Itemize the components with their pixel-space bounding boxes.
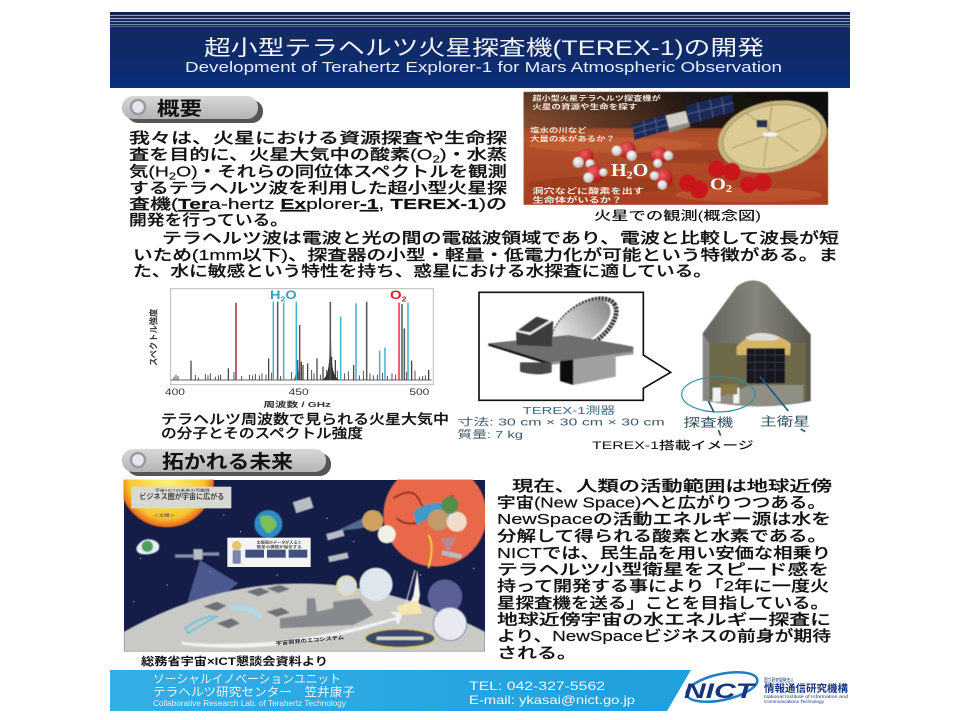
icon: light beams [186, 560, 238, 604]
axis tick labels [165, 387, 429, 397]
label: main satellite: 主衛星 [760, 415, 810, 429]
icon: water molecules [573, 141, 673, 190]
footer: contact: TEL: 042-327-5562 [469, 679, 605, 693]
text block: terahertz explanation [133, 229, 839, 280]
icon: instrument base plate [488, 335, 633, 364]
leader lines [708, 377, 805, 436]
footer: affiliation [153, 672, 355, 708]
text block: future paragraph: 星探査機を送る」ことを目指している。 [497, 595, 829, 612]
text block: terahertz explanation: テラヘルツ波は電波と光の間の電磁波領域であり、電波と比較して波長が短 [162, 229, 839, 247]
label: O2: 2 [402, 294, 407, 303]
text block: future paragraph: より、NewSpaceビジネスの前身が期待 [497, 627, 831, 645]
circle highlight on probe [682, 377, 755, 412]
label: H2O: 2 [627, 171, 633, 182]
text block: overview paragraph: 査を目的に、火星大気中の酸素(O [129, 146, 355, 164]
info box: 衛星の機能が保全する [257, 544, 302, 549]
text block: overview paragraph: 2 [169, 172, 177, 182]
chart: Martian atmosphere spectrum [148, 288, 433, 409]
icon: Earth [254, 510, 282, 538]
icon: sun [124, 480, 215, 528]
callout box: TEREX-1 instrument [479, 288, 671, 400]
logo: NICT: Communications Technology [764, 699, 825, 704]
info box [227, 538, 311, 567]
image: Mars observation concept: 生命体がいるか？ [532, 194, 622, 204]
axis title: spectral intensity: スペクトル強度 [148, 308, 159, 366]
title: 超小型テラヘルツ火星探査機(TEREX-1)の開発 [204, 37, 764, 60]
label: H2O: H [270, 288, 279, 302]
text block: terahertz explanation: いため(1mm以下)、探査器の小型・軽量・低電力化が可能という特徴がある。ま [133, 246, 838, 264]
icon: asteroid ship [365, 629, 435, 648]
icon: spacecraft solar panels and bus [632, 94, 734, 140]
image: Mars observation concept: 火星の資源や生命を探す [532, 102, 637, 111]
logo: NICT [684, 667, 849, 707]
heading: future: 拓かれる未来 [162, 451, 293, 473]
axis tick labels: 450 [289, 387, 309, 397]
figure: TEREX-1 and mounting image [457, 280, 811, 452]
label: H2O: O [633, 160, 648, 180]
illustration: space business ecosystem [124, 480, 485, 652]
label: tagline: 超小型火星テラヘルツ探査機が [532, 94, 661, 103]
ecosystem label: 宇宙開発のエコシステム [276, 634, 344, 647]
axis title: frequency: 周波数 / GHz [263, 399, 331, 409]
logo: NICT: NICT [684, 680, 757, 703]
image: Mars observation concept [523, 91, 833, 205]
text block: terahertz explanation: た、水に敏感という特性を持ち、惑星における水探査に適している。 [133, 262, 712, 280]
caption: Mars observation: 火星での観測(概念図) [594, 208, 761, 223]
text block: overview paragraph: )・水蒸 [440, 146, 507, 164]
text block: overview paragraph: O)・それらの同位体スペクトルを観測 [176, 164, 507, 180]
text block: future paragraph: 分解して得られる酸素と水素である。 [497, 528, 827, 545]
caption: source: 総務省宇宙×ICT懇談会資料より [141, 654, 328, 668]
image: Mars observation concept: 大量の水があるか？ [530, 134, 615, 143]
text block: overview paragraph: するテラヘルツ波を利用した超小型火星探 [129, 180, 507, 197]
caption: spectrum: の分子とそのスペクトル強度 [161, 426, 364, 441]
icon: parabolic disc [717, 100, 828, 174]
footer: affiliation: Collaborative Research Lab. of Terahertz Technology [153, 699, 346, 708]
label: TEREX-1 instrument: TEREX-1測器 [523, 404, 615, 417]
axis tick labels: 500 [409, 387, 429, 397]
icon: moon surface [124, 583, 485, 652]
text block: future paragraph: テラヘルツ小型衛星をスピード感を [497, 560, 829, 578]
icon: fairing cutaway [703, 280, 811, 407]
heading: overview [122, 96, 263, 123]
text block: future paragraph: される。 [497, 645, 577, 662]
label: mass: 質量: 7 kg [457, 428, 523, 441]
info box: 太陽風のデータが入ると [257, 540, 302, 545]
text block: future paragraph: 現在、人類の活動範囲は地球近傍 [512, 477, 832, 495]
label: mounting image: TEREX-1搭載イメージ [592, 438, 754, 452]
footer banner [110, 667, 849, 711]
icon: bubble views [359, 568, 393, 601]
text block: future paragraph: NewSpaceの活動エネルギー源は水を [497, 511, 831, 528]
logo: NICT: 国立研究開発法人 [764, 677, 794, 684]
sun label: ＜太陽＞ [153, 513, 176, 518]
label: O2: O [710, 174, 723, 193]
text block: overview paragraph: 開発を行っている。 [129, 212, 288, 229]
text block: future paragraph: NICTでは、民生品を用い安価な相乗り [497, 545, 831, 562]
footer: affiliation: ソーシャルイノベーションユニット [153, 672, 341, 686]
image: Mars observation concept: 洞穴などに酸素を出す [532, 185, 644, 195]
text block: overview paragraph [129, 130, 507, 229]
title box: business expands into space: 宇宙×ICTの未来の可能性 [155, 487, 210, 492]
label: H2O: H [611, 160, 625, 180]
text block: overview paragraph: 2 [432, 154, 441, 166]
title box: business expands into space: ビジネス圏が宇宙に広がる [139, 491, 224, 501]
title box: business expands into space [131, 487, 231, 508]
footer: contact [469, 679, 635, 707]
axis tick labels: 400 [165, 387, 185, 397]
label: H2O: O [285, 288, 297, 302]
caption: spectrum [161, 412, 449, 441]
icon: antenna dish [545, 288, 625, 362]
icon: box module [516, 317, 553, 347]
label: dimensions: 寸法: 30 cm × 30 cm × 30 cm [457, 416, 665, 429]
text block: overview paragraph: 気(H [129, 164, 160, 180]
icon: moon base [280, 598, 373, 628]
text block: overview paragraph: 我々は、火星における資源探査や生命探 [129, 130, 507, 147]
spectral noise peaks [171, 370, 432, 380]
label: probe: 探査機 [683, 415, 733, 429]
stars [133, 515, 474, 602]
text block: overview paragraph: 査機( Ter a-hertz Ex plorer -1 , TEREX-1 )の [129, 196, 507, 213]
label: H2O: 2 [280, 294, 285, 303]
text block: future paragraph: 地球近傍宇宙の水エネルギー探査に [497, 612, 831, 628]
icon: cloud badge [136, 539, 159, 554]
text block: future paragraph [497, 477, 832, 662]
logo: NICT: 情報通信研究機構 [764, 682, 848, 695]
icon: satellites [175, 497, 462, 562]
footer: contact: E-mail: ykasai@nict.go.jp [469, 693, 635, 707]
logo: NICT: National Institute of Information and [764, 694, 849, 699]
caption: spectrum: テラヘルツ周波数で見られる火星大気中 [161, 412, 449, 427]
header banner [110, 12, 850, 88]
label: O2: 2 [726, 184, 732, 195]
icon: Mars globe [383, 463, 487, 567]
heading: overview: 概要 [157, 98, 202, 120]
icon: rocket [410, 570, 420, 603]
subtitle: Development of Terahertz Explorer-1 for Mars Atmospheric Observation [185, 60, 782, 76]
image: Mars observation concept: 塩水の川など [530, 125, 587, 134]
heading: future [122, 449, 331, 476]
text block: future paragraph: 宇宙(New Space)へと広がりつつある。 [497, 494, 826, 512]
footer: affiliation: テラヘルツ研究センター 笠井康子 [153, 684, 355, 699]
icon: oxygen molecules [679, 160, 772, 199]
label: O2: O [390, 288, 399, 302]
text block: future paragraph: 持って開発する事により「2年に一度火 [497, 578, 829, 595]
